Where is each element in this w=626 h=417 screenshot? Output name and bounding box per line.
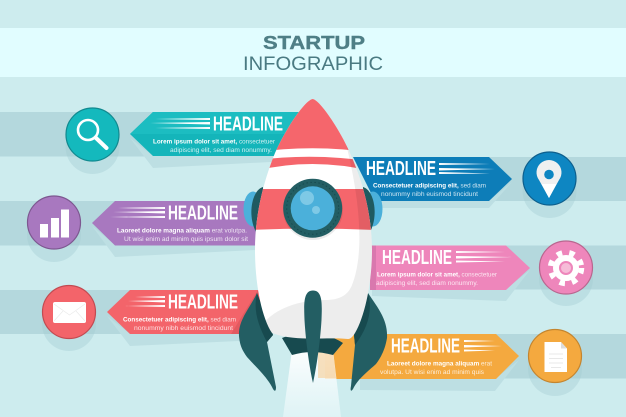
icon: map pin	[523, 152, 576, 205]
fin inner shadow	[256, 293, 370, 345]
right fin	[351, 293, 387, 391]
background stripes	[0, 112, 626, 378]
title band	[0, 28, 626, 77]
banner shadows	[92, 138, 530, 391]
panel: orange headline banner: HEADLINE	[391, 336, 460, 358]
panel: orange headline banner: Laoreet dolore magna aliquam erat	[387, 362, 492, 368]
panel: blue headline banner: Consectetuer adipiscing elit, sed diam	[373, 184, 486, 190]
panel: pink headline banner: adipiscing elit, sed diam nonummy.	[376, 281, 478, 287]
body shading	[266, 146, 372, 339]
panel: blue headline banner	[353, 157, 512, 201]
panel: orange headline banner: volutpa. Ut wisi enim ad minim quis	[380, 370, 484, 376]
panel: purple headline banner: Ut wisi enim ad minim quis ipsum dolor sit	[124, 237, 248, 243]
body	[255, 99, 372, 339]
panel: red headline banner: nonummy nibh euismod tincidunt	[134, 326, 233, 332]
speed lines	[125, 296, 165, 307]
nozzle	[282, 333, 343, 355]
icon: magnifier	[66, 108, 119, 161]
red stripe	[269, 156, 356, 168]
left fin	[239, 293, 276, 391]
red band	[250, 189, 375, 230]
icon: gear	[540, 241, 592, 294]
panel: pink headline banner: HEADLINE	[382, 247, 452, 269]
porthole	[283, 179, 343, 240]
icon: document	[528, 330, 582, 382]
panel: pink headline banner	[370, 246, 530, 290]
panel: pink headline banner: Lorem ipsum dolor sit amet, consectetuer	[377, 272, 497, 278]
title: INFOGRAPHIC	[243, 54, 383, 75]
title: STARTUP	[263, 33, 365, 53]
speed lines	[110, 207, 165, 218]
panel: purple headline banner: HEADLINE	[168, 202, 238, 224]
panel: teal headline banner: Lorem ipsum dolor sit amet, consectetuer	[153, 140, 275, 146]
center fin	[304, 290, 322, 383]
speed lines	[439, 163, 495, 174]
title	[243, 33, 383, 75]
panel: red headline banner: Consectetuer adipiscing elit, sed diam	[123, 318, 236, 324]
panel: teal headline banner: HEADLINE	[213, 114, 283, 136]
panel: purple headline banner: Laoreet dolore magna aliquam erat volutpa.	[117, 228, 247, 234]
panel: blue headline banner: nonummy nibh euismod tincidunt	[381, 192, 478, 198]
icon shadows	[27, 120, 593, 396]
red nose	[276, 99, 348, 150]
panel: purple headline banner	[92, 201, 260, 246]
side windows	[244, 187, 382, 232]
panel: orange headline banner	[325, 334, 519, 379]
speed lines	[456, 251, 512, 262]
panel: teal headline banner	[130, 112, 302, 156]
icon: bar chart	[28, 196, 80, 249]
panel: teal headline banner: adipiscing elit, sed diam nonummy.	[170, 148, 272, 154]
rocket	[239, 95, 387, 417]
speed lines	[150, 118, 210, 129]
exhaust flame	[283, 350, 341, 417]
panel: red headline banner: HEADLINE	[168, 292, 238, 314]
speed lines	[464, 340, 502, 352]
icon: envelope	[42, 286, 96, 338]
panel: red headline banner	[107, 290, 262, 334]
panel: blue headline banner: HEADLINE	[366, 158, 436, 180]
